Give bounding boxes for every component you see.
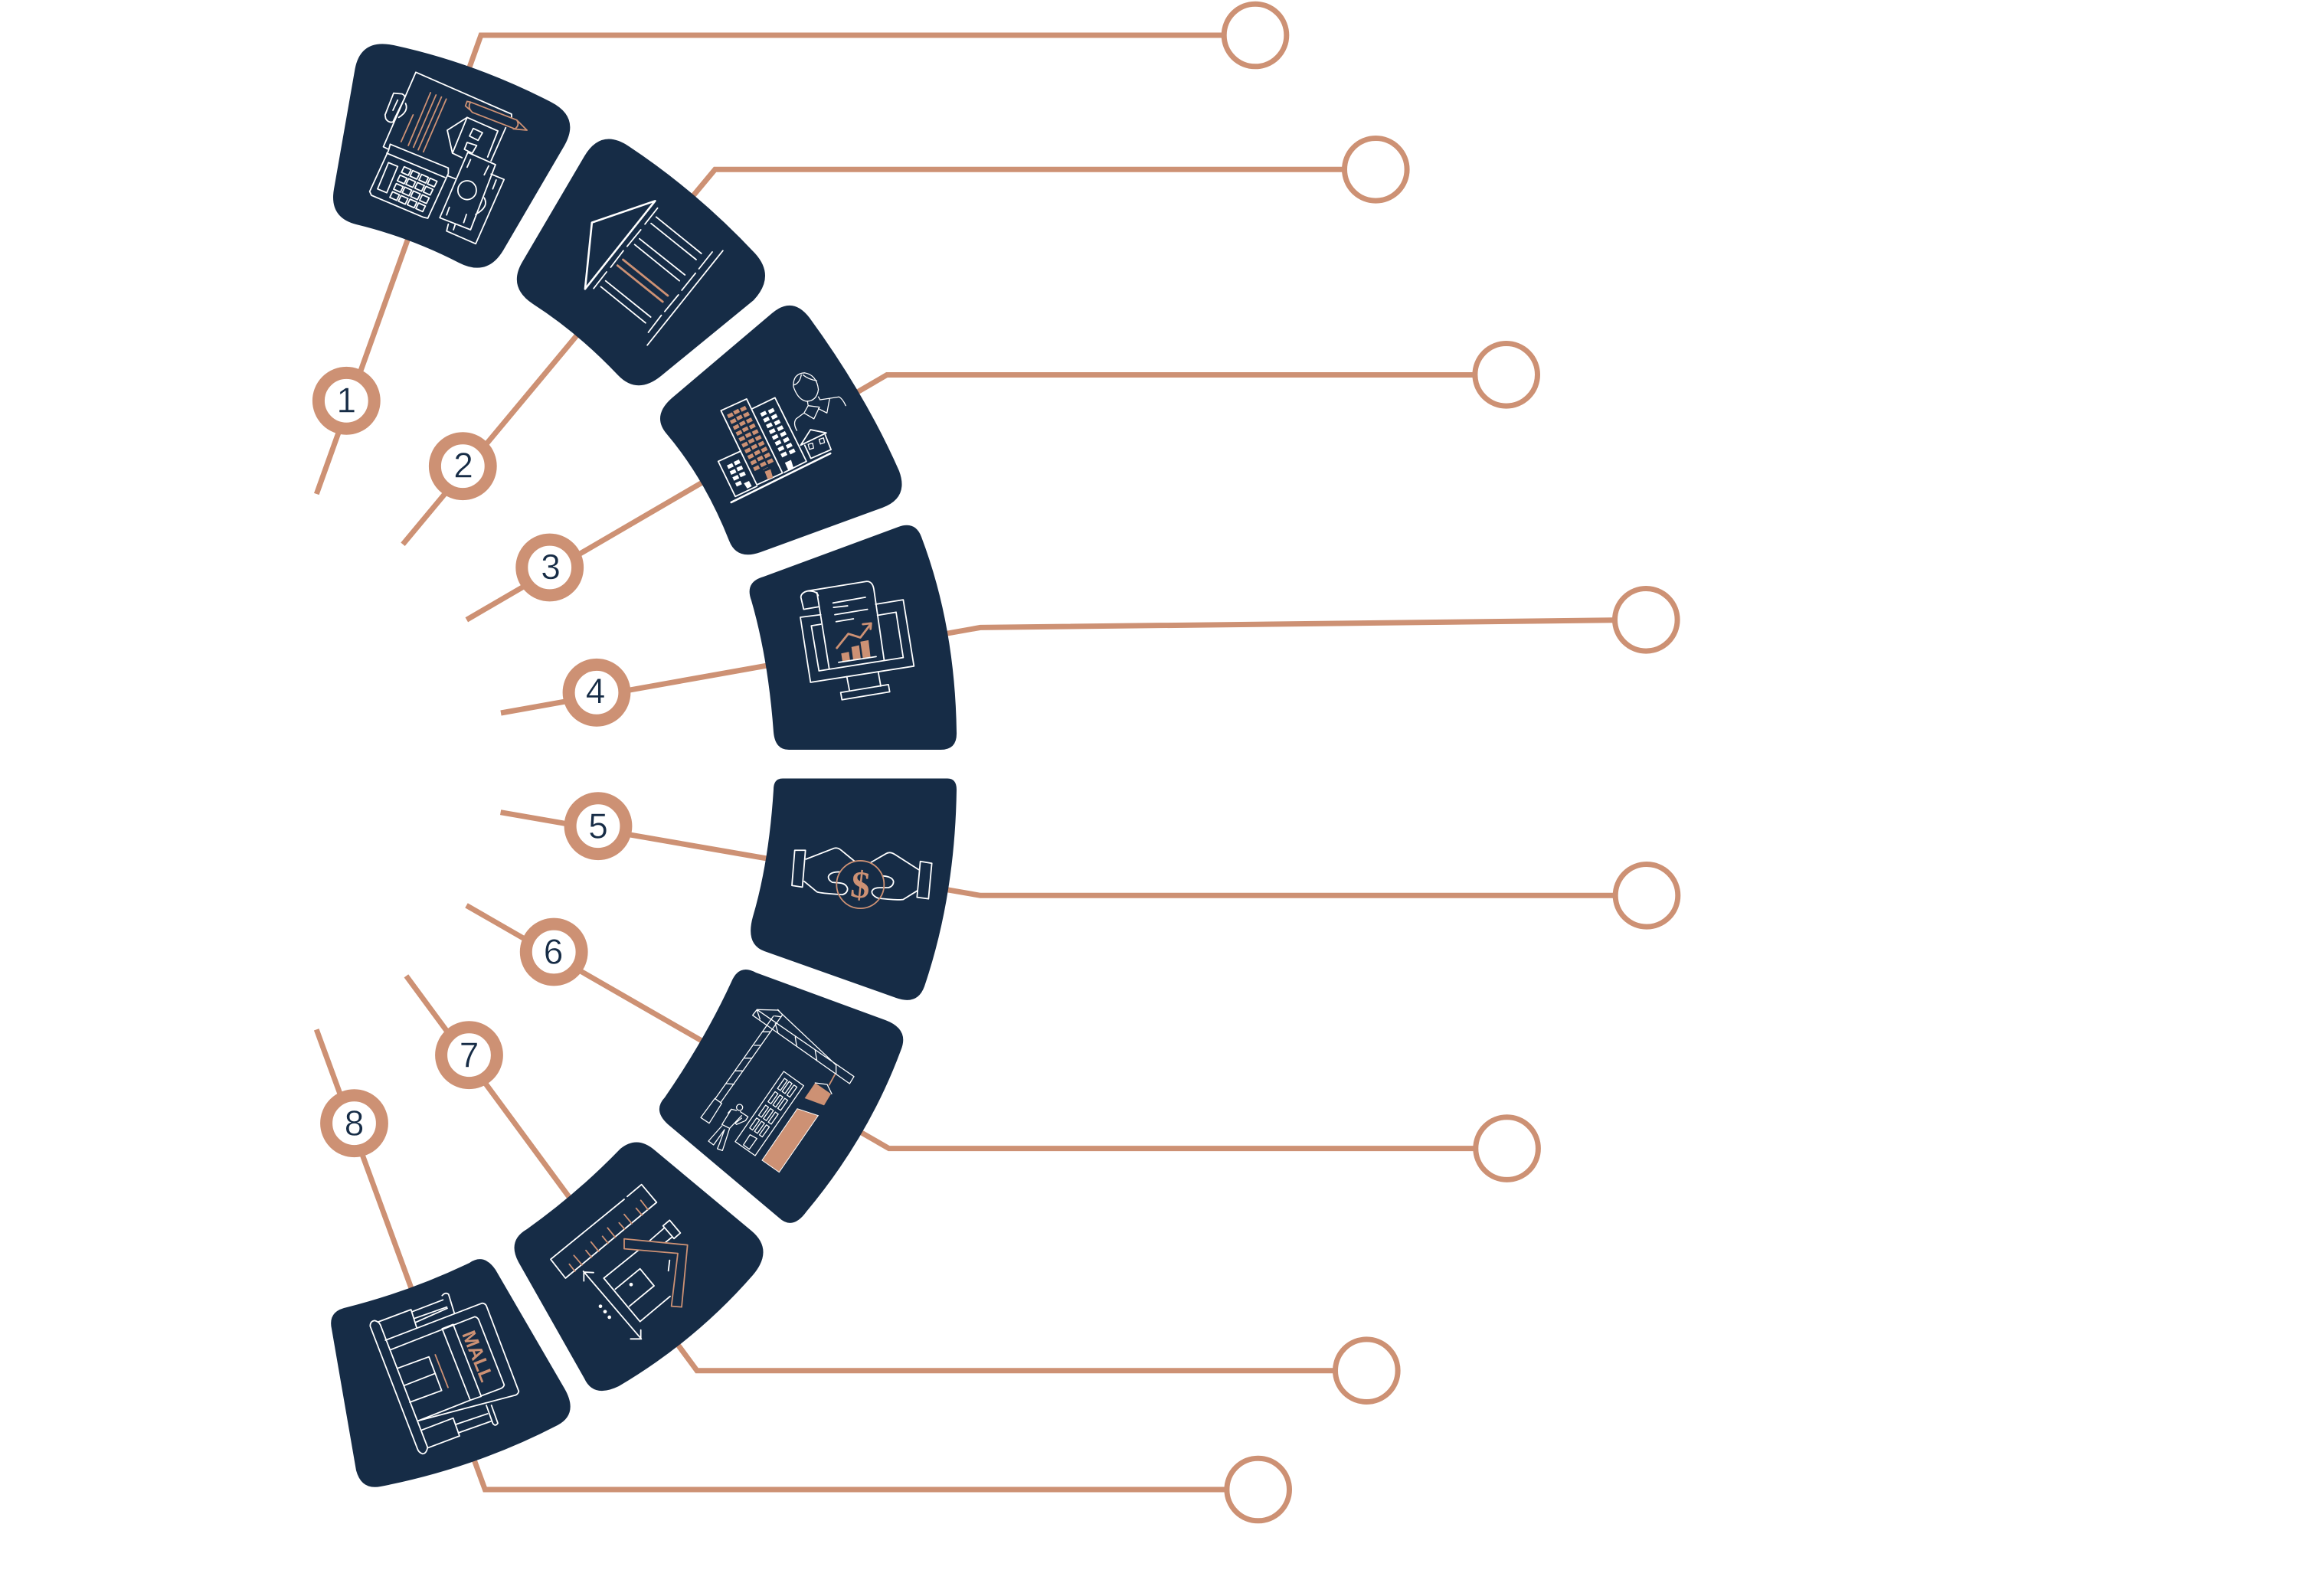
panel: card 4 — [750, 525, 957, 750]
icon: shopping mall plan with sign — [370, 1293, 519, 1454]
number badge 2: 2 — [453, 446, 473, 486]
leader line 7 with end circle — [406, 976, 1398, 1401]
icon: monitor with report and growth chart — [800, 581, 914, 700]
panel: card 3 — [660, 306, 902, 554]
panel: card 2 — [517, 139, 765, 385]
leader line 6 with end circle — [466, 905, 1538, 1179]
number badge 4: 4 — [586, 671, 605, 711]
leader line 5 with end circle — [501, 813, 1678, 927]
number badge 1: 1 — [337, 380, 356, 420]
card 1 background — [333, 44, 570, 268]
number badge 6: 6 — [544, 931, 563, 971]
leader line 4 with end circle — [501, 588, 1677, 713]
number badge 5: 5 — [588, 806, 608, 845]
number badge 8: 8 — [345, 1103, 364, 1143]
icon: handshake over dollar coin: $ — [849, 862, 872, 907]
leader line 8 with end circle — [316, 1029, 1290, 1521]
card 2 background — [517, 139, 765, 385]
card 3 background — [660, 306, 902, 554]
icon: ruler, set square and house plan — [551, 1185, 688, 1339]
panel: card 7 — [515, 1142, 764, 1391]
icon: handshake over dollar coin — [792, 848, 932, 908]
icon: shopping mall plan with sign: MALL — [457, 1328, 497, 1385]
number badge 2 — [435, 438, 491, 494]
icon: tower crane, building and worker — [701, 1009, 854, 1172]
number badge 7 — [441, 1027, 497, 1083]
number badge 6 — [526, 924, 582, 980]
number badge 4 — [569, 665, 624, 721]
number badge 5 — [571, 798, 626, 854]
icon: columned bank building — [585, 201, 723, 345]
number badge 1 — [319, 373, 375, 429]
card 5 background — [751, 778, 957, 1000]
panel: card 5 — [751, 778, 957, 1000]
number badge 8 — [326, 1095, 382, 1151]
number badge 7: 7 — [460, 1035, 479, 1075]
icon: paperwork, house plan, calculator and cash — [370, 72, 527, 244]
leader line 2 with end circle — [403, 138, 1407, 545]
icon: city towers, house and agent — [718, 373, 846, 502]
card 6 background — [659, 970, 903, 1223]
card 7 background — [515, 1142, 764, 1391]
number badge 3: 3 — [541, 547, 561, 587]
leader line 3 with end circle — [466, 343, 1537, 620]
leader line 1 with end circle — [316, 4, 1287, 494]
number badge 3 — [522, 540, 577, 595]
card 8 background — [331, 1259, 571, 1487]
panel: card 8 — [331, 1259, 571, 1487]
panel: card 6 — [659, 970, 903, 1223]
panel: card 1 — [333, 44, 570, 268]
card 4 background — [750, 525, 957, 750]
